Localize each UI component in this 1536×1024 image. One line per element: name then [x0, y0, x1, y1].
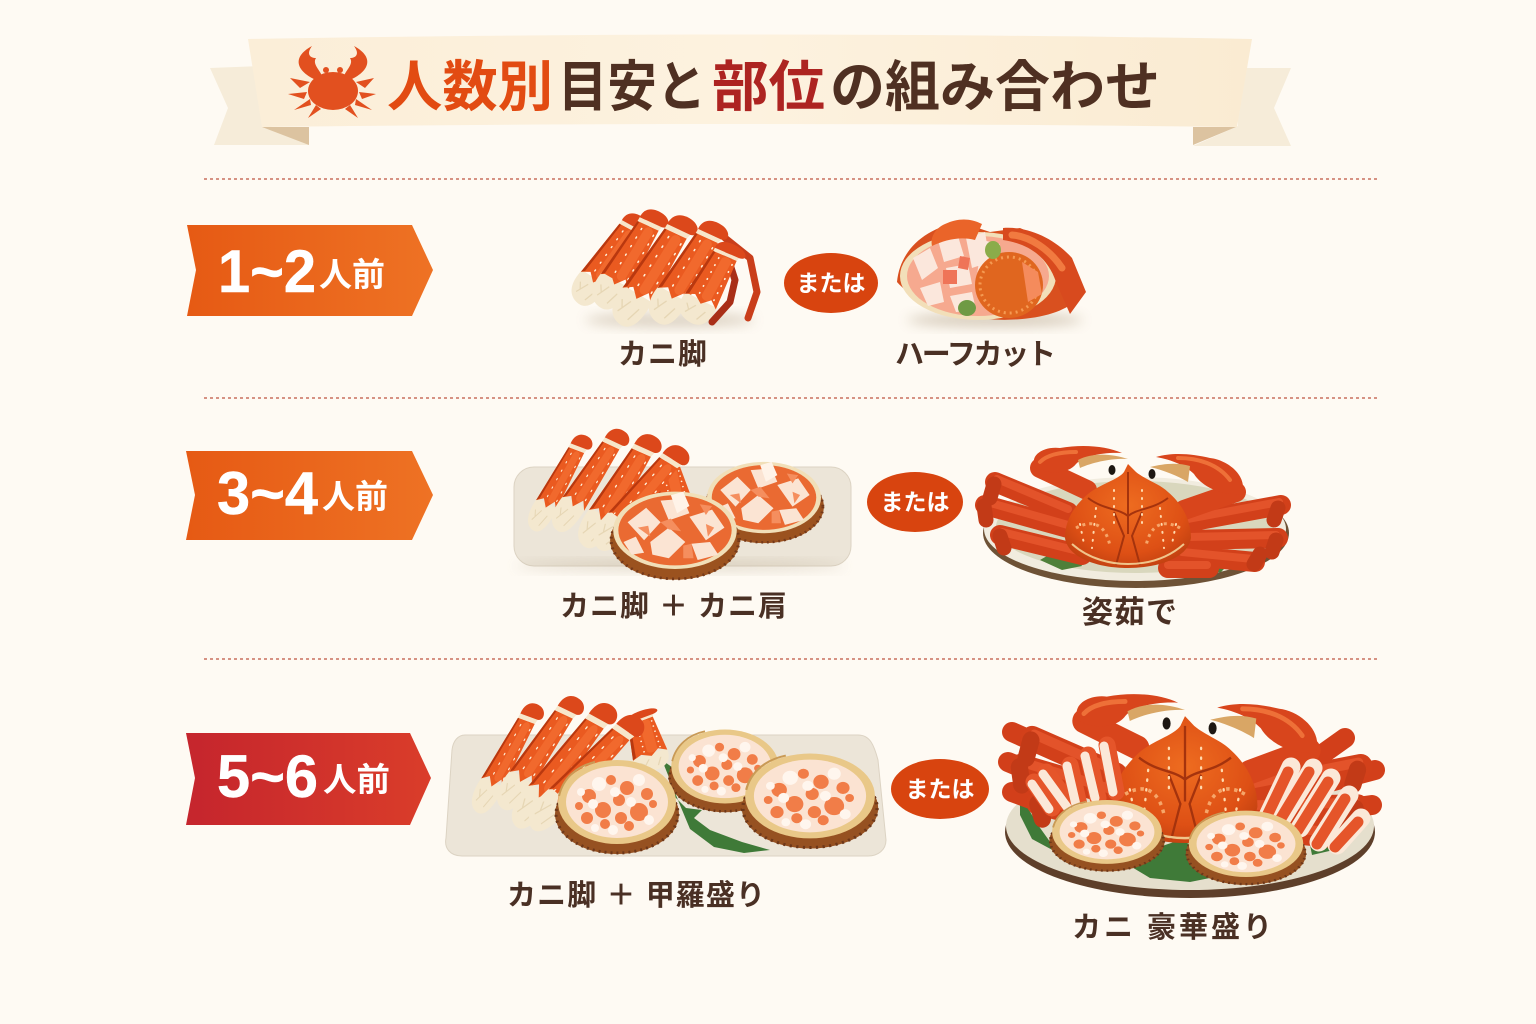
- divider 1: [204, 178, 1378, 180]
- plate: [983, 478, 1289, 588]
- row 1 serving badge: 1~2: [218, 238, 316, 305]
- ribbon fold left: [262, 127, 309, 145]
- row 3 deluxe crab platter: [1005, 694, 1375, 898]
- shell back: [704, 462, 824, 543]
- row 3 serving badge: 人前: [323, 761, 390, 798]
- cut legs right: [1265, 767, 1361, 847]
- row 3 serving badge: [186, 733, 431, 825]
- title text: [387, 56, 1160, 118]
- row 1 option separator: [784, 253, 878, 313]
- row 1 half cut crab: [897, 220, 1086, 327]
- ribbon fold right: [1193, 127, 1236, 145]
- row 1 serving badge: [187, 225, 433, 316]
- garnish: [1020, 795, 1350, 882]
- divider 3: [204, 658, 1378, 660]
- shell right: [742, 754, 878, 848]
- row 2 option separator: [867, 472, 963, 532]
- row 1 option separator: または: [796, 270, 866, 296]
- row 3 label: legs + shell serving: カニ脚 ＋ 甲羅盛り: [507, 879, 765, 912]
- row 3 serving badge: 5~6: [217, 743, 318, 810]
- title text: の組み合わせ: [830, 56, 1160, 118]
- row 2 label: whole boiled: 姿茹で: [1082, 595, 1177, 630]
- extra legs: [1008, 732, 1375, 815]
- row 1 label: half cut: ハーフカット: [895, 339, 1056, 371]
- row 2 label: legs + shoulder: カニ脚 ＋ カニ肩: [560, 590, 787, 623]
- crab: [984, 446, 1281, 568]
- shell left: [1049, 800, 1165, 871]
- ribbon tail left: [210, 66, 309, 145]
- shell front: [555, 760, 679, 854]
- row 2 legs and shells platter: [514, 422, 851, 580]
- row 3 option separator: または: [906, 776, 974, 802]
- row 3 option separator: [891, 759, 989, 819]
- row 3 label: deluxe platter: カニ 豪華盛り: [1072, 911, 1272, 944]
- row 2 serving badge: [186, 451, 433, 540]
- row 2 whole crab on plate: [983, 446, 1289, 588]
- row 2 serving badge: 3~4: [217, 460, 319, 527]
- row 1 serving badge: 人前: [319, 256, 385, 293]
- title banner: [210, 34, 1291, 146]
- plate: [514, 467, 851, 566]
- crab legs: [466, 688, 675, 840]
- row 3 legs and shells platter: [446, 688, 886, 856]
- row 1 crab legs: [565, 201, 757, 334]
- row 1 label: crab legs: カニ脚: [618, 338, 707, 371]
- cut legs left: [1032, 745, 1116, 809]
- shell right: [1186, 811, 1306, 885]
- plate: [446, 735, 886, 856]
- garnish: [662, 760, 770, 853]
- crab legs: [522, 422, 699, 559]
- garnish: [1040, 552, 1235, 574]
- ribbon main: [248, 34, 1252, 127]
- title text: 目安と: [558, 56, 706, 118]
- shell middle: [669, 730, 781, 812]
- title text: 人数別: [387, 56, 553, 118]
- divider 2: [204, 397, 1378, 399]
- ribbon tail right: [1193, 68, 1291, 146]
- row 2 option separator: または: [880, 489, 950, 515]
- row 2 serving badge: 人前: [322, 478, 388, 515]
- plate: [1005, 766, 1375, 898]
- shell front: [610, 492, 740, 580]
- icon: crab: [288, 46, 376, 118]
- crab: [1019, 694, 1361, 843]
- title text: 部位: [712, 56, 825, 118]
